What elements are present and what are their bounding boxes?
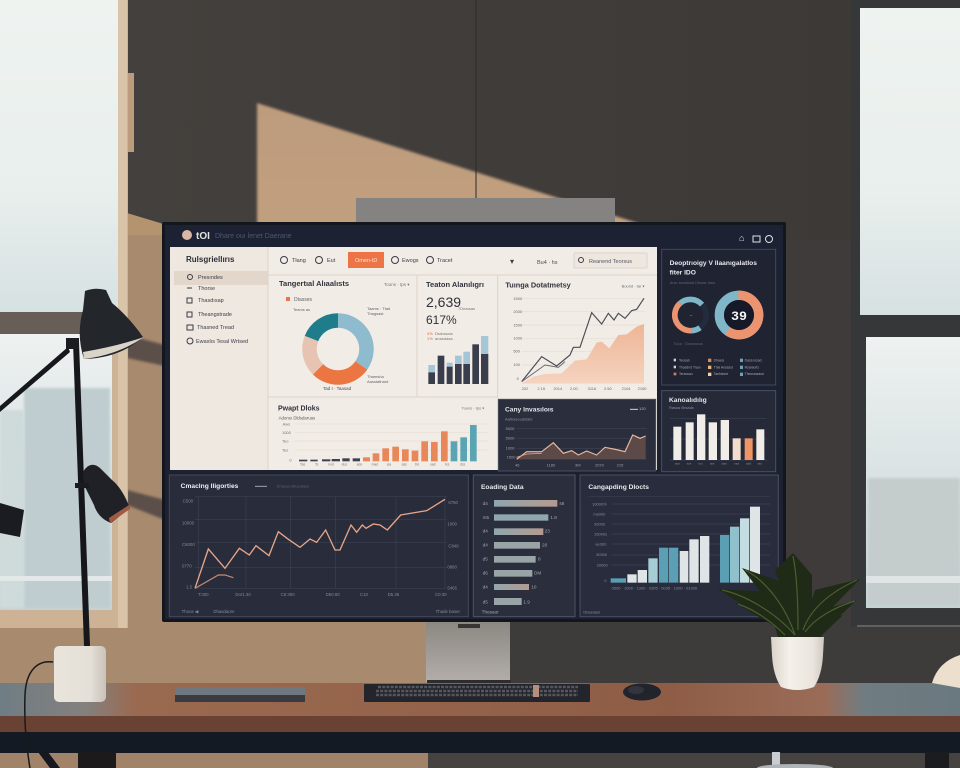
panel: bottom bar chart: Aws: [283, 422, 290, 427]
panel: dark line chart: Cany Invasıloıs: [505, 406, 554, 413]
lamp left spot: [0, 503, 24, 537]
panel: trend area chart: 2014: [553, 386, 563, 391]
panel: horizontal bars: 10: [531, 584, 537, 589]
panel: ascending bars: 30000: [594, 521, 606, 526]
panel: bottom bar chart: Pwapt Dloks: [278, 406, 320, 413]
panel: trend area chart: 1500: [513, 296, 523, 301]
panel: sidebar: Rulsgriellırıs: [186, 255, 235, 264]
panel: wide line chart: D50.80: [326, 592, 340, 597]
panel: horizontal bars: d6: [483, 571, 488, 576]
panel: bottom bar chart: Adonsı Dldsdaruas: [279, 415, 315, 420]
panel: white bar chart: ssa: [734, 461, 739, 465]
panel: donut summary: [662, 249, 776, 385]
panel: sidebar: [170, 247, 268, 470]
panel: white bar chart: tao: [758, 461, 762, 465]
legend: Thesnaısasd: [745, 372, 764, 376]
panel: white bar chart: Kanoalıdılıg: [669, 397, 707, 404]
panel: bottom bar chart: Tes: [282, 448, 288, 453]
panel: dark line chart: Aathasoudstats: [505, 417, 532, 422]
panel: donut summary: Toos · Dssnasus: [673, 341, 703, 346]
monitor bezel: [162, 222, 786, 622]
panel: donut analysis: Teanıs as: [293, 307, 310, 312]
panel: bottom bar chart: ass: [402, 463, 407, 467]
panel: horizontal bars: Eoading Data: [481, 484, 524, 491]
panel: donut analysis: Toons · tps ▾: [384, 282, 410, 287]
panel: horizontal bars: 8: [538, 557, 541, 562]
panel: dark line chart: 3M: [575, 463, 581, 468]
panel: donut analysis: Dtasses: [294, 297, 313, 303]
panel: ascending bars: ms000: [593, 511, 606, 516]
panel: sidebar: Tħeangstrade: [198, 312, 232, 318]
panel: ascending bars: [580, 475, 778, 617]
panel: wide line chart: 6750: [448, 500, 459, 505]
top bar: ⌂: [739, 233, 744, 243]
panel: dark line chart: 46: [515, 463, 520, 468]
panel: bottom bar chart: lınd: [328, 463, 334, 467]
panel: horizontal bars: 1.8: [550, 515, 557, 520]
lamp: [0, 289, 144, 646]
panel: navigation tabs: Eut: [327, 258, 336, 264]
panel: trend area chart: [498, 275, 647, 398]
panel: bottom bar chart: Ts: [315, 463, 319, 467]
panel: trend area chart: 2104: [622, 386, 631, 391]
panel: bottom bar chart: [278, 406, 488, 467]
panel: white bar chart: tou: [698, 461, 703, 465]
panel: bottom bar chart: trd: [415, 463, 419, 467]
right window: [851, 0, 960, 627]
panel: navigation tabs: Tłang: [292, 258, 306, 264]
panel: horizontal bars: 1.9: [523, 599, 530, 604]
panel: horizontal bars: d4: [483, 584, 488, 589]
panel: trend area chart: 2150: [638, 386, 647, 391]
panel: wide line chart: C846: [448, 543, 459, 548]
panel: trend area chart: 1000: [513, 335, 523, 340]
panel: dark line chart: ▬▬ 120: [630, 406, 647, 411]
panel: wide line chart: 0770: [182, 563, 192, 568]
panel: wide line chart: C10: [360, 592, 369, 597]
panel: sidebar: Thorse: [198, 286, 215, 292]
panel: horizontal bars: d4: [483, 529, 488, 534]
panel: wide line chart: [169, 475, 468, 617]
panel: wide line chart: ▬▬▬: [255, 483, 267, 488]
panel: wide line chart: Dhasdaore: [213, 609, 235, 614]
panel: horizontal bars: d4: [483, 501, 488, 506]
panel: sidebar: Thasdısap: [198, 298, 224, 304]
cable: [25, 662, 53, 768]
panel: trend area chart: 2.50: [604, 386, 613, 391]
top bar: [182, 230, 772, 243]
panel: horizontal bars: 20: [542, 543, 548, 548]
panel: bottom bar chart: dus: [342, 463, 347, 467]
panel: trend area chart: 2.00: [570, 386, 579, 391]
monitor mount behind screen: [356, 198, 615, 225]
stacked bar chart: [428, 336, 488, 384]
keyboard: [364, 684, 590, 702]
panel: donut analysis: Tad I · Taasad: [323, 386, 352, 391]
panel: small stats and bars: Teaton Alanılıgrı: [426, 280, 484, 289]
panel: horizontal bars: DM: [534, 571, 541, 576]
panel: dark line chart: 215: [617, 463, 624, 468]
legend: Teosatı: [679, 359, 690, 363]
legend: Dasa Iosad: [745, 359, 762, 363]
panel: white bar chart: sus: [687, 461, 692, 465]
panel: sidebar: Thasned Tread: [197, 325, 234, 331]
panel: wide line chart: Dhasus ldlusdlass: [277, 483, 309, 488]
panel: sidebar: Presındes: [198, 275, 223, 281]
panel: wide line chart: Thoos ◀: [182, 609, 199, 614]
panel: horizontal bars: 23: [545, 529, 550, 534]
panel: donut analysis: Thamsha: [367, 374, 384, 379]
panel: donut summary: ~: [689, 313, 692, 319]
panel: navigation tabs: Tracet: [437, 258, 453, 264]
panel: navigation tabs: Ewogs: [402, 258, 419, 264]
panel: trend area chart: 2.15: [537, 386, 546, 391]
panel: wide line chart: 0880: [447, 564, 458, 569]
panel: white bar chart: odd: [746, 461, 751, 465]
panel: ascending bars: Cangapding Dlocts: [588, 484, 649, 491]
tablet: [175, 687, 305, 702]
panel: wide line chart: Dor1.30: [235, 592, 251, 597]
panel: dark line chart: 1500: [507, 455, 516, 460]
panel: small stats and bars: arıasdasa: [435, 336, 453, 341]
plant pot: [771, 637, 824, 690]
panel: navigation tabs: Reanend Teorsus: [589, 259, 632, 265]
panel: ascending bars: Dhasdasr: [583, 610, 601, 615]
panel: trend area chart: Tuınga Dotatmetsy: [505, 281, 572, 290]
panel: donut analysis: Taams · Ttad: [367, 306, 390, 311]
panel: wide line chart: 1000: [447, 522, 458, 527]
mouse: [623, 684, 661, 700]
plant leaves: [718, 553, 860, 637]
panel: ascending bars: 0: [604, 578, 607, 583]
panel: bottom bar chart: Tas: [300, 463, 306, 467]
panel: white bar chart: Rasus Brsads: [669, 405, 694, 410]
panel: horizontal bars: d4: [483, 543, 488, 548]
panel: dark line chart: 1000: [506, 445, 515, 450]
top bar: Dhare ouı lenet Daerane: [215, 233, 292, 240]
panel: wide line chart: D5.35: [388, 592, 400, 597]
panel: bottom bar chart: txs: [445, 463, 450, 467]
panel: small stats and bars: 7Dearsas: [458, 306, 475, 311]
monitor: [162, 222, 786, 622]
panel: wide line chart: Cmaclng Iligorties: [181, 483, 239, 490]
panel: navigation tabs: Bu4 · hs: [537, 260, 558, 266]
panel: ascending bars: 30300: [596, 552, 608, 557]
panel: dark line chart: 5000: [506, 435, 515, 440]
legend: Dhaeıs: [714, 359, 725, 363]
panel: donut analysis: [279, 279, 410, 391]
panel: ascending bars: 0500 · 1000 · 1300 · 0305 · 0035 · 1000 · 01900: [612, 585, 698, 590]
legend: Teraosaıı: [679, 372, 693, 376]
panel: dark line chart: [498, 399, 656, 471]
lamp pole: [73, 342, 90, 646]
panel: wide line chart: T:300: [198, 592, 209, 597]
panel: bottom bar chart: Teo: [282, 439, 289, 444]
panel: horizontal bars: m5: [483, 515, 490, 520]
panel: wide line chart: 10000: [182, 520, 195, 525]
panel: navigation tabs: Omen-tD: [355, 258, 377, 264]
panel: white bar chart: dao: [722, 461, 727, 465]
legend: Rsaraoıts: [745, 365, 759, 369]
left window: [0, 0, 128, 628]
panel: trend area chart: 202: [522, 386, 529, 391]
panel: ascending bars: 20000: [597, 563, 609, 568]
panel: trend area chart: 3116: [588, 386, 597, 391]
panel: trend area chart: 2000: [513, 309, 523, 314]
legend: Thasdrıd Traoı: [679, 365, 701, 369]
panel: white bar chart: [662, 391, 776, 472]
panel: bottom bar chart: 0: [289, 458, 292, 463]
panel: horizontal bars: s8: [559, 501, 565, 506]
panel: wide line chart: 5466: [447, 585, 458, 590]
panel: small stats and bars: 1%: [427, 336, 433, 341]
panel: trend area chart: Bound · tar ▾: [622, 283, 644, 288]
lamp lower spot: [83, 465, 130, 523]
panel: horizontal bars: d5: [483, 557, 488, 562]
plant leaf highlights: [722, 556, 857, 635]
monitor stand: [426, 620, 511, 687]
panel: ascending bars: ao300: [595, 541, 607, 546]
plant: [718, 553, 860, 690]
panel: ascending bars: 10000s: [594, 531, 607, 536]
panel: dark line chart: 1180: [547, 463, 556, 468]
panel: sidebar: Ewaxlıs Tesal Wrtsed: [196, 339, 248, 345]
panel: donut summary: fiter IDO: [670, 269, 696, 276]
panel: donut analysis: Tangertıal Alıaalısts: [279, 279, 349, 288]
panel: bottom bar chart: ısa: [387, 463, 391, 467]
chair back: [932, 655, 960, 688]
panel: donut analysis: Aasstathard: [367, 379, 388, 384]
panel: trend area chart: 0: [517, 376, 520, 381]
light dashboard area: [170, 247, 657, 470]
legend: Taebtsıtot: [714, 372, 728, 376]
panel: wide line chart: Thade baser: [436, 609, 461, 614]
panel: donut summary: Ansı toudstad Dhaas tlaor: [670, 280, 716, 285]
legend: [674, 359, 764, 376]
legend: Thal Aesasıd: [714, 365, 733, 369]
panel: trend area chart: 100: [513, 362, 521, 367]
panel: donut summary: 39: [731, 310, 747, 325]
top bar: tOI: [196, 231, 210, 242]
desk: [0, 683, 960, 768]
panel: horizontal bars: [473, 475, 575, 617]
panel: small stats and bars: Dsdıasaıs: [435, 331, 453, 336]
panel: trend area chart: 500: [513, 349, 521, 354]
panel: trend area chart: 1500: [513, 322, 523, 327]
panel: white bar chart: ara: [710, 461, 715, 465]
panel: dark line chart: 5000: [506, 426, 515, 431]
panel: wide line chart: C5:300: [281, 592, 295, 597]
panel: horizontal bars: Thesaor: [482, 610, 499, 615]
panel: donut analysis: Thagsast: [367, 311, 384, 316]
panel: small stats and bars: 617%: [426, 313, 457, 327]
panel: wide line chart: 1.5: [186, 584, 193, 589]
lamp arm: [0, 347, 70, 412]
donut chart: [309, 320, 366, 377]
panel: donut summary: Deoptrıoigy V Ilaanıgalatlos: [670, 260, 757, 267]
lamp upper shade: [80, 289, 143, 359]
panel: navigation tabs: [280, 252, 647, 268]
dividers: [268, 247, 657, 470]
panel: bottom bar chart: dcs: [460, 463, 466, 467]
panel: wide line chart: C0:30: [435, 592, 447, 597]
panel: horizontal bars: d5: [483, 599, 488, 604]
panel: bottom bar chart: ado: [357, 463, 362, 467]
large donut with value: [719, 295, 759, 335]
mug: [54, 646, 106, 702]
panel: white bar chart: aoo: [675, 461, 680, 465]
panel: wide line chart: C500: [183, 499, 194, 504]
panel: small stats and bars: [426, 280, 488, 384]
panel: dark line chart: 2070: [595, 463, 605, 468]
panel: small stats and bars: 2,639: [426, 294, 461, 310]
panel: bottom bar chart: Toons · tps ▾: [462, 406, 484, 411]
panel: bottom bar chart: mad: [372, 463, 378, 467]
panel: ascending bars: 10000%: [592, 501, 607, 506]
panel: navigation tabs: ▾: [510, 257, 514, 266]
panel: bottom bar chart: 1000: [282, 430, 292, 435]
small donut: [675, 299, 706, 331]
panel: bottom bar chart: oad: [430, 463, 436, 467]
panel: wide line chart: C6000: [182, 542, 195, 547]
panel: small stats and bars: 4%: [427, 331, 433, 336]
